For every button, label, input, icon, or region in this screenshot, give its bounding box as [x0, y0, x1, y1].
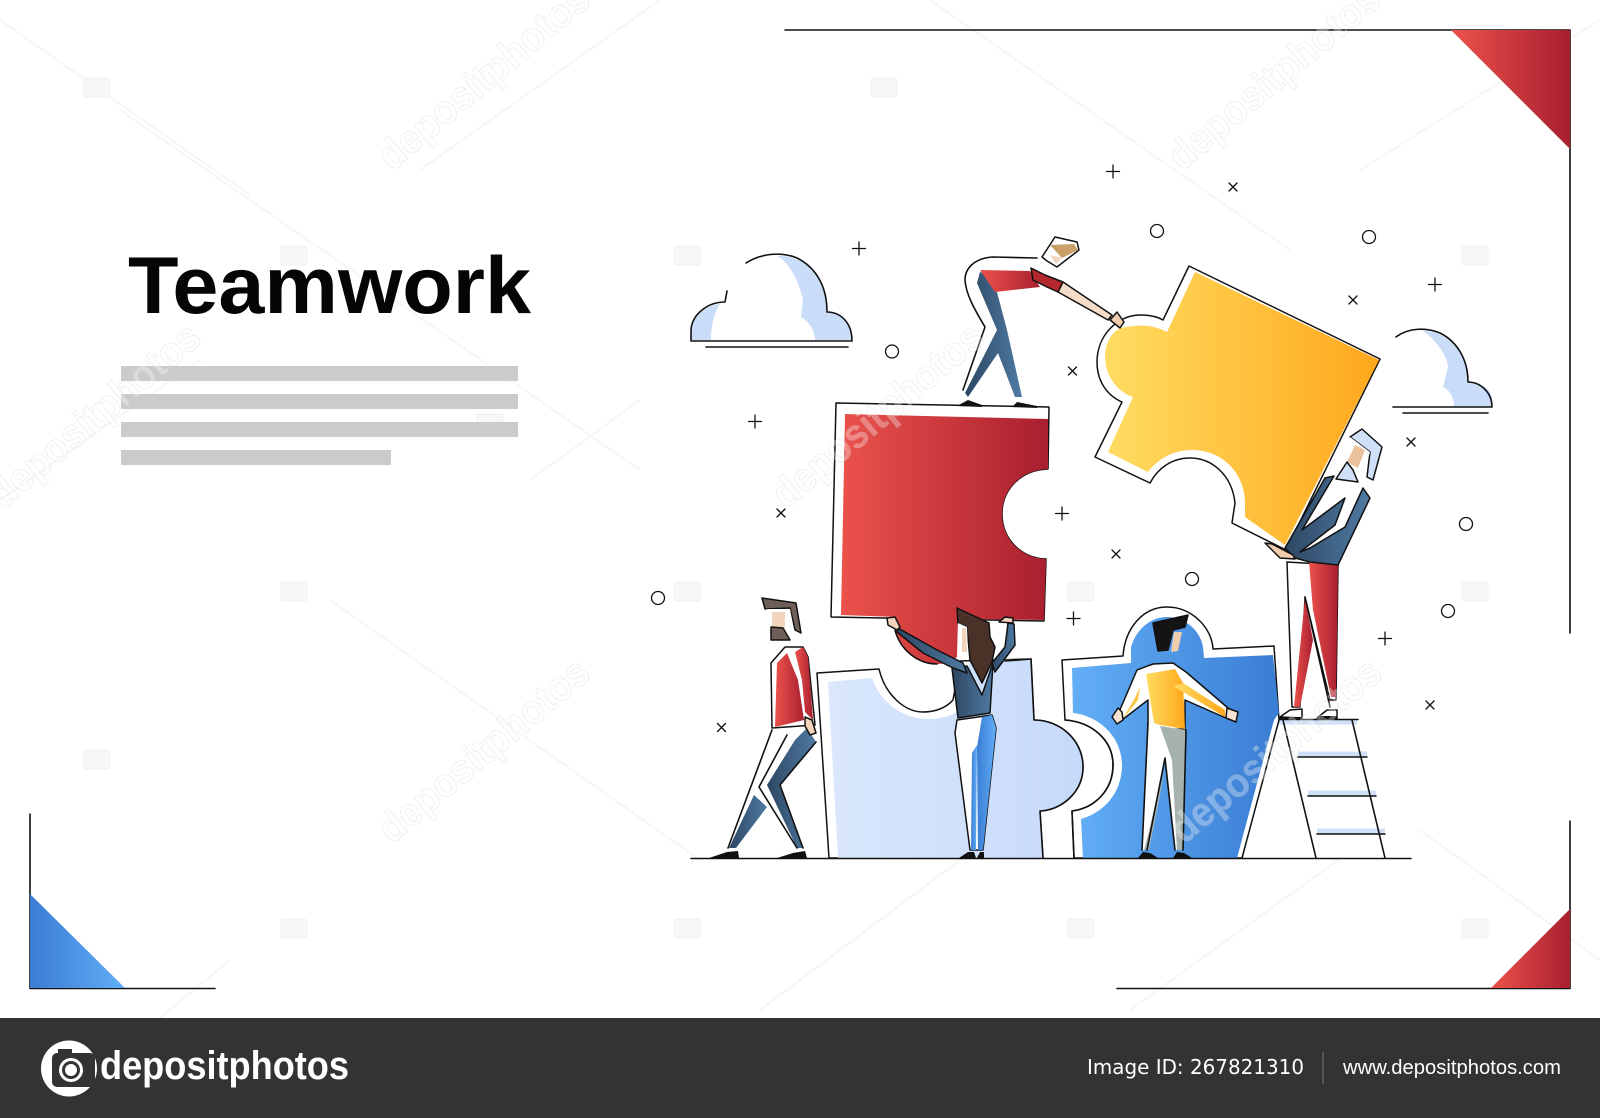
ladder man head	[1336, 429, 1382, 482]
footer logo wordmark: depositphotos	[100, 1044, 349, 1088]
cloud left	[691, 254, 852, 347]
ladder man jacket	[1285, 476, 1370, 565]
woman hands	[887, 617, 1013, 630]
woman trousers	[955, 715, 996, 850]
puzzle piece: blue	[1062, 607, 1279, 858]
top man trousers	[963, 257, 1037, 397]
center man hands	[1112, 708, 1238, 724]
title: Teamwork	[128, 241, 532, 331]
puzzle piece: yellow	[1095, 266, 1380, 550]
top man shoes	[957, 400, 1037, 408]
ladder	[1242, 720, 1385, 858]
frame: bottom right corner	[1117, 821, 1570, 988]
ladder man hand	[1265, 543, 1295, 559]
woman jacket and arms	[897, 623, 1015, 718]
puzzle piece: red	[831, 403, 1049, 664]
footer image id: Image ID: 267821310	[1087, 1055, 1304, 1079]
center man head	[1153, 615, 1188, 652]
woman shoes	[959, 852, 984, 858]
puzzle piece: light blue	[817, 659, 1083, 858]
footer logo icon	[41, 1040, 97, 1096]
decorative circles	[652, 224, 1472, 618]
ladder man shoes	[1280, 709, 1337, 719]
person: left man pushing	[709, 598, 816, 858]
cloud right	[1393, 329, 1492, 413]
watermark text	[0, 0, 1390, 852]
top man head	[1042, 237, 1079, 267]
top man shirt	[980, 268, 1063, 292]
footer bar	[0, 1018, 1600, 1118]
person: woman lifting red piece	[887, 608, 1015, 858]
footer divider	[1322, 1052, 1324, 1084]
decorative crosses	[718, 183, 1434, 732]
top man arm and hand	[1058, 282, 1124, 328]
center man shoes	[1138, 852, 1192, 858]
footer url: www.depositphotos.com	[1342, 1057, 1561, 1079]
person: man on ladder	[1265, 429, 1382, 720]
ground line	[691, 858, 1411, 860]
woman head and hair	[957, 608, 995, 683]
center man trousers	[1142, 723, 1186, 850]
left man shoes	[709, 851, 807, 858]
watermark text: depositphotos	[368, 648, 598, 852]
person: center man in yellow	[1112, 615, 1238, 858]
left man head	[762, 598, 801, 640]
decorative plus signs	[748, 165, 1442, 645]
center man arms and torso	[1119, 663, 1228, 729]
left man torso	[771, 647, 816, 735]
person: top man pulling yellow piece	[957, 237, 1124, 408]
text placeholder bars	[121, 366, 518, 465]
ladder man trousers	[1287, 562, 1338, 707]
left man legs	[728, 728, 816, 848]
watermark text: depositphotos	[762, 313, 992, 517]
frame: bottom left corner	[30, 814, 215, 988]
watermark text: depositphotos	[1160, 648, 1390, 852]
watermark camera icons	[84, 78, 1488, 938]
frame: top right corner	[785, 30, 1570, 633]
